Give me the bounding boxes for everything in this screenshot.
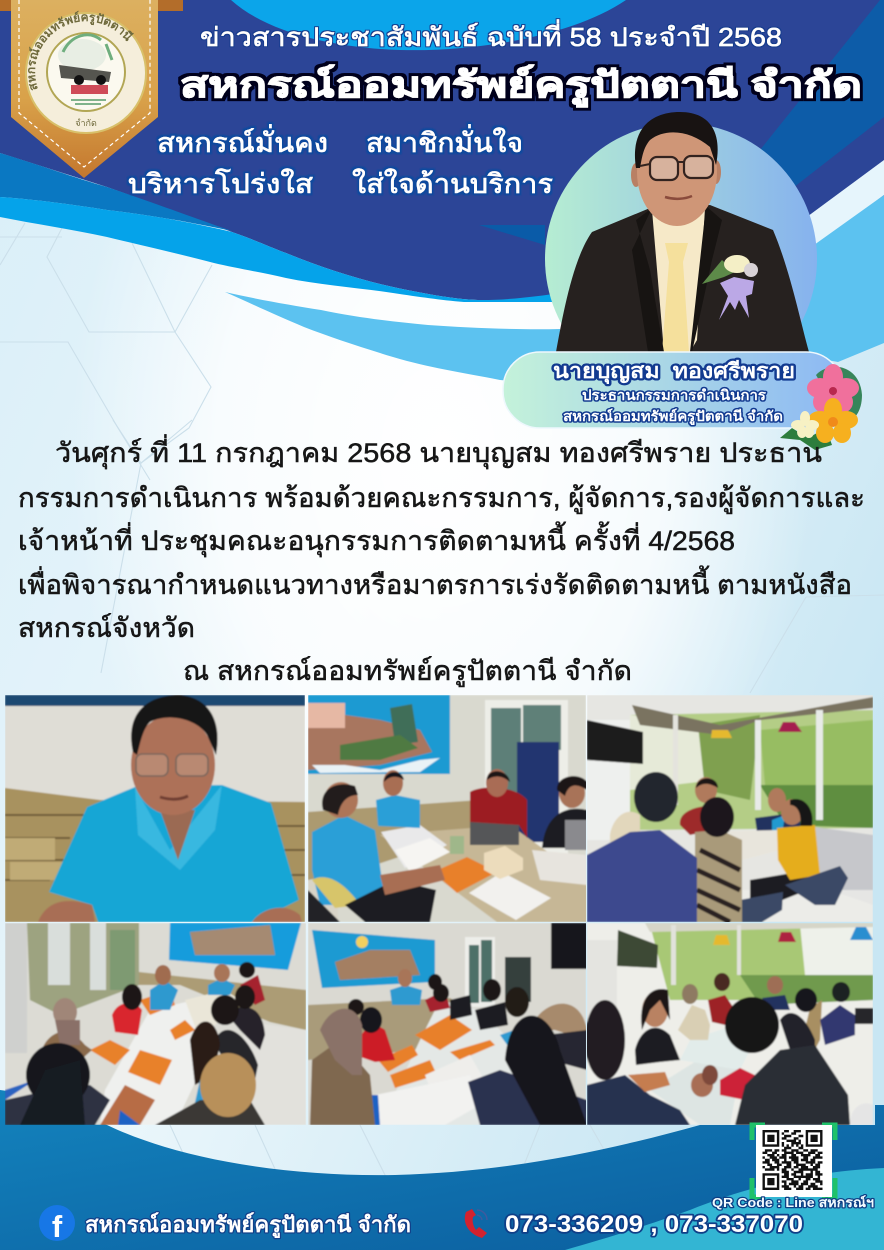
icon: corsage — [702, 255, 758, 320]
phone numbers: 073-336209 , 073-337070 — [505, 1211, 803, 1238]
body paragraph: กรรมการดำเนินการ พร้อมด้วยคณะกรรมการ, ผู้จัดการ,รองผู้จัดการและ — [18, 483, 865, 514]
icon: facebook — [39, 1205, 75, 1244]
photo: long table right view — [308, 923, 587, 1125]
newsletter issue line: ข่าวสารประชาสัมพันธ์ ฉบับที่ 58 ประจำปี 2568 — [200, 19, 782, 52]
name pill — [503, 352, 843, 428]
photo: table with laughing woman — [585, 923, 873, 1125]
photo: chairman in blue polo — [5, 695, 305, 922]
body paragraph — [18, 434, 865, 687]
logo shield — [0, 0, 183, 178]
icon: phone — [465, 1209, 487, 1238]
QR code — [752, 1125, 835, 1197]
main title: สหกรณ์ออมทรัพย์ครูปัตตานี จำกัด — [180, 64, 862, 108]
footer background — [0, 1090, 884, 1250]
portrait: chairman — [556, 112, 809, 352]
chairman name: นายบุญสม ทองศรีพราย — [553, 359, 795, 385]
photo: meeting by windows — [587, 695, 873, 922]
header wave background — [0, 0, 884, 385]
icon: cooperative seal: สหกรณ์ออมทรัพย์ครูปัตตานี — [28, 10, 134, 90]
photo: meeting with laptop — [308, 695, 587, 922]
body paragraph: สหกรณ์จังหวัด — [18, 612, 195, 643]
icon: tropical flowers — [780, 364, 862, 450]
body paragraph: เพื่อพิจารณากำหนดแนวทางหรือมาตรการเร่งรัดติดตามหนี้ ตามหนังสือ — [18, 565, 852, 600]
chairman position: ประธานกรรมการดำเนินการ — [582, 387, 767, 403]
slogans: ใส่ใจด้านบริการ — [352, 168, 553, 199]
cooperative name: สหกรณ์ออมทรัพย์ครูปัตตานี จำกัด — [563, 408, 783, 425]
slogans — [128, 124, 553, 199]
body paragraph: วันศุกร์ ที่ 11 กรกฎาคม 2568 นายบุญสม ทองศรีพราย ประธาน — [55, 434, 822, 470]
body paragraph: เจ้าหน้าที่ ประชุมคณะอนุกรรมการติดตามหนี้ ครั้งที่ 4/2568 — [18, 521, 735, 558]
icon: facebook: f — [52, 1209, 63, 1244]
slogans: สมาชิกมั่นใจ — [366, 124, 523, 158]
portrait backdrop circle — [545, 123, 817, 395]
facebook page name: สหกรณ์ออมทรัพย์ครูปัตตานี จำกัด — [85, 1212, 411, 1239]
body paragraph: ณ สหกรณ์ออมทรัพย์ครูปัตตานี จำกัด — [183, 655, 632, 687]
QR caption: QR Code : Line สหกรณ์ฯ — [712, 1195, 874, 1210]
icon: cooperative seal — [25, 10, 147, 134]
slogans: บริหารโปร่งใส — [128, 168, 313, 199]
icon: cooperative seal: จำกัด — [75, 118, 97, 128]
photo: long table left view — [5, 923, 306, 1125]
slogans: สหกรณ์มั่นคง — [157, 124, 328, 158]
